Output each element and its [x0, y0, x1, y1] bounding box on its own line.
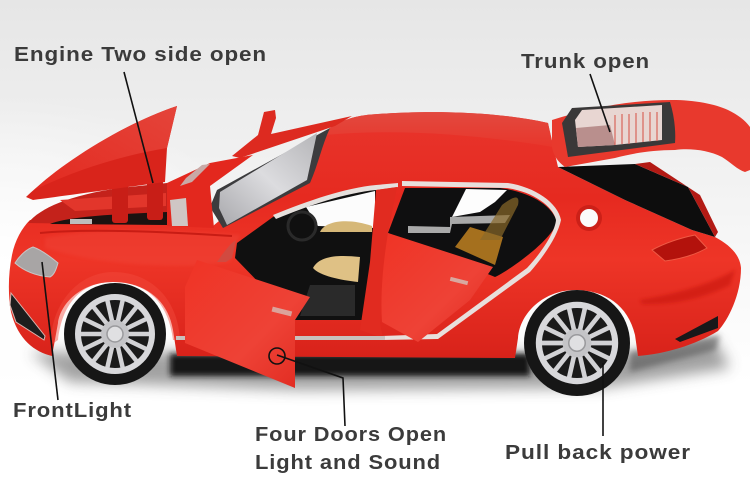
trunk inner edge: [635, 162, 718, 237]
front door: [185, 260, 310, 388]
upper body highlight: [45, 230, 240, 266]
label: FrontLight: FrontLight: [13, 400, 132, 422]
cowl: [167, 155, 253, 228]
car body: [9, 112, 741, 358]
opened hood panel: [26, 106, 177, 200]
sill chrome: [295, 336, 385, 340]
callout: trunk: [521, 51, 650, 132]
label: Pull back power: Pull back power: [505, 442, 691, 464]
rear wheel: [524, 290, 630, 396]
callout: engine: [14, 44, 267, 183]
red toy car: [9, 100, 750, 396]
chrome vent: [180, 164, 210, 186]
opened side flap: [232, 110, 352, 158]
rear highlight: [640, 270, 735, 304]
rear door opening interior: [388, 188, 557, 277]
taillight: [652, 235, 707, 261]
rear door: [381, 233, 493, 342]
wheel arch front: [51, 272, 180, 345]
label: Engine Two side open: Engine Two side open: [14, 44, 267, 66]
callout: doors: [255, 348, 447, 446]
fuel cap: [576, 205, 602, 231]
windshield: [210, 128, 330, 228]
front wheel: [64, 283, 166, 385]
rear fog lights: [675, 316, 718, 342]
trunk opening: [558, 164, 715, 237]
label: Trunk open: Trunk open: [521, 51, 650, 73]
fender crease: [40, 231, 232, 236]
rear window chrome: [382, 181, 561, 340]
ground shadow: [30, 335, 730, 390]
label: Four Doors Open: Four Doors Open: [255, 424, 447, 446]
headlight: [15, 247, 58, 277]
callout: front light: [13, 262, 132, 422]
B pillar: [360, 187, 397, 338]
sill chrome front: [176, 336, 186, 340]
label: Light and Sound: Light and Sound: [255, 452, 441, 474]
front grille: [10, 293, 45, 340]
open trunk hatch: [552, 100, 750, 172]
engine bay: [28, 180, 188, 226]
front window chrome: [273, 183, 398, 219]
roof: [325, 112, 553, 147]
front door opening interior: [235, 188, 376, 320]
mirror: [217, 240, 236, 262]
